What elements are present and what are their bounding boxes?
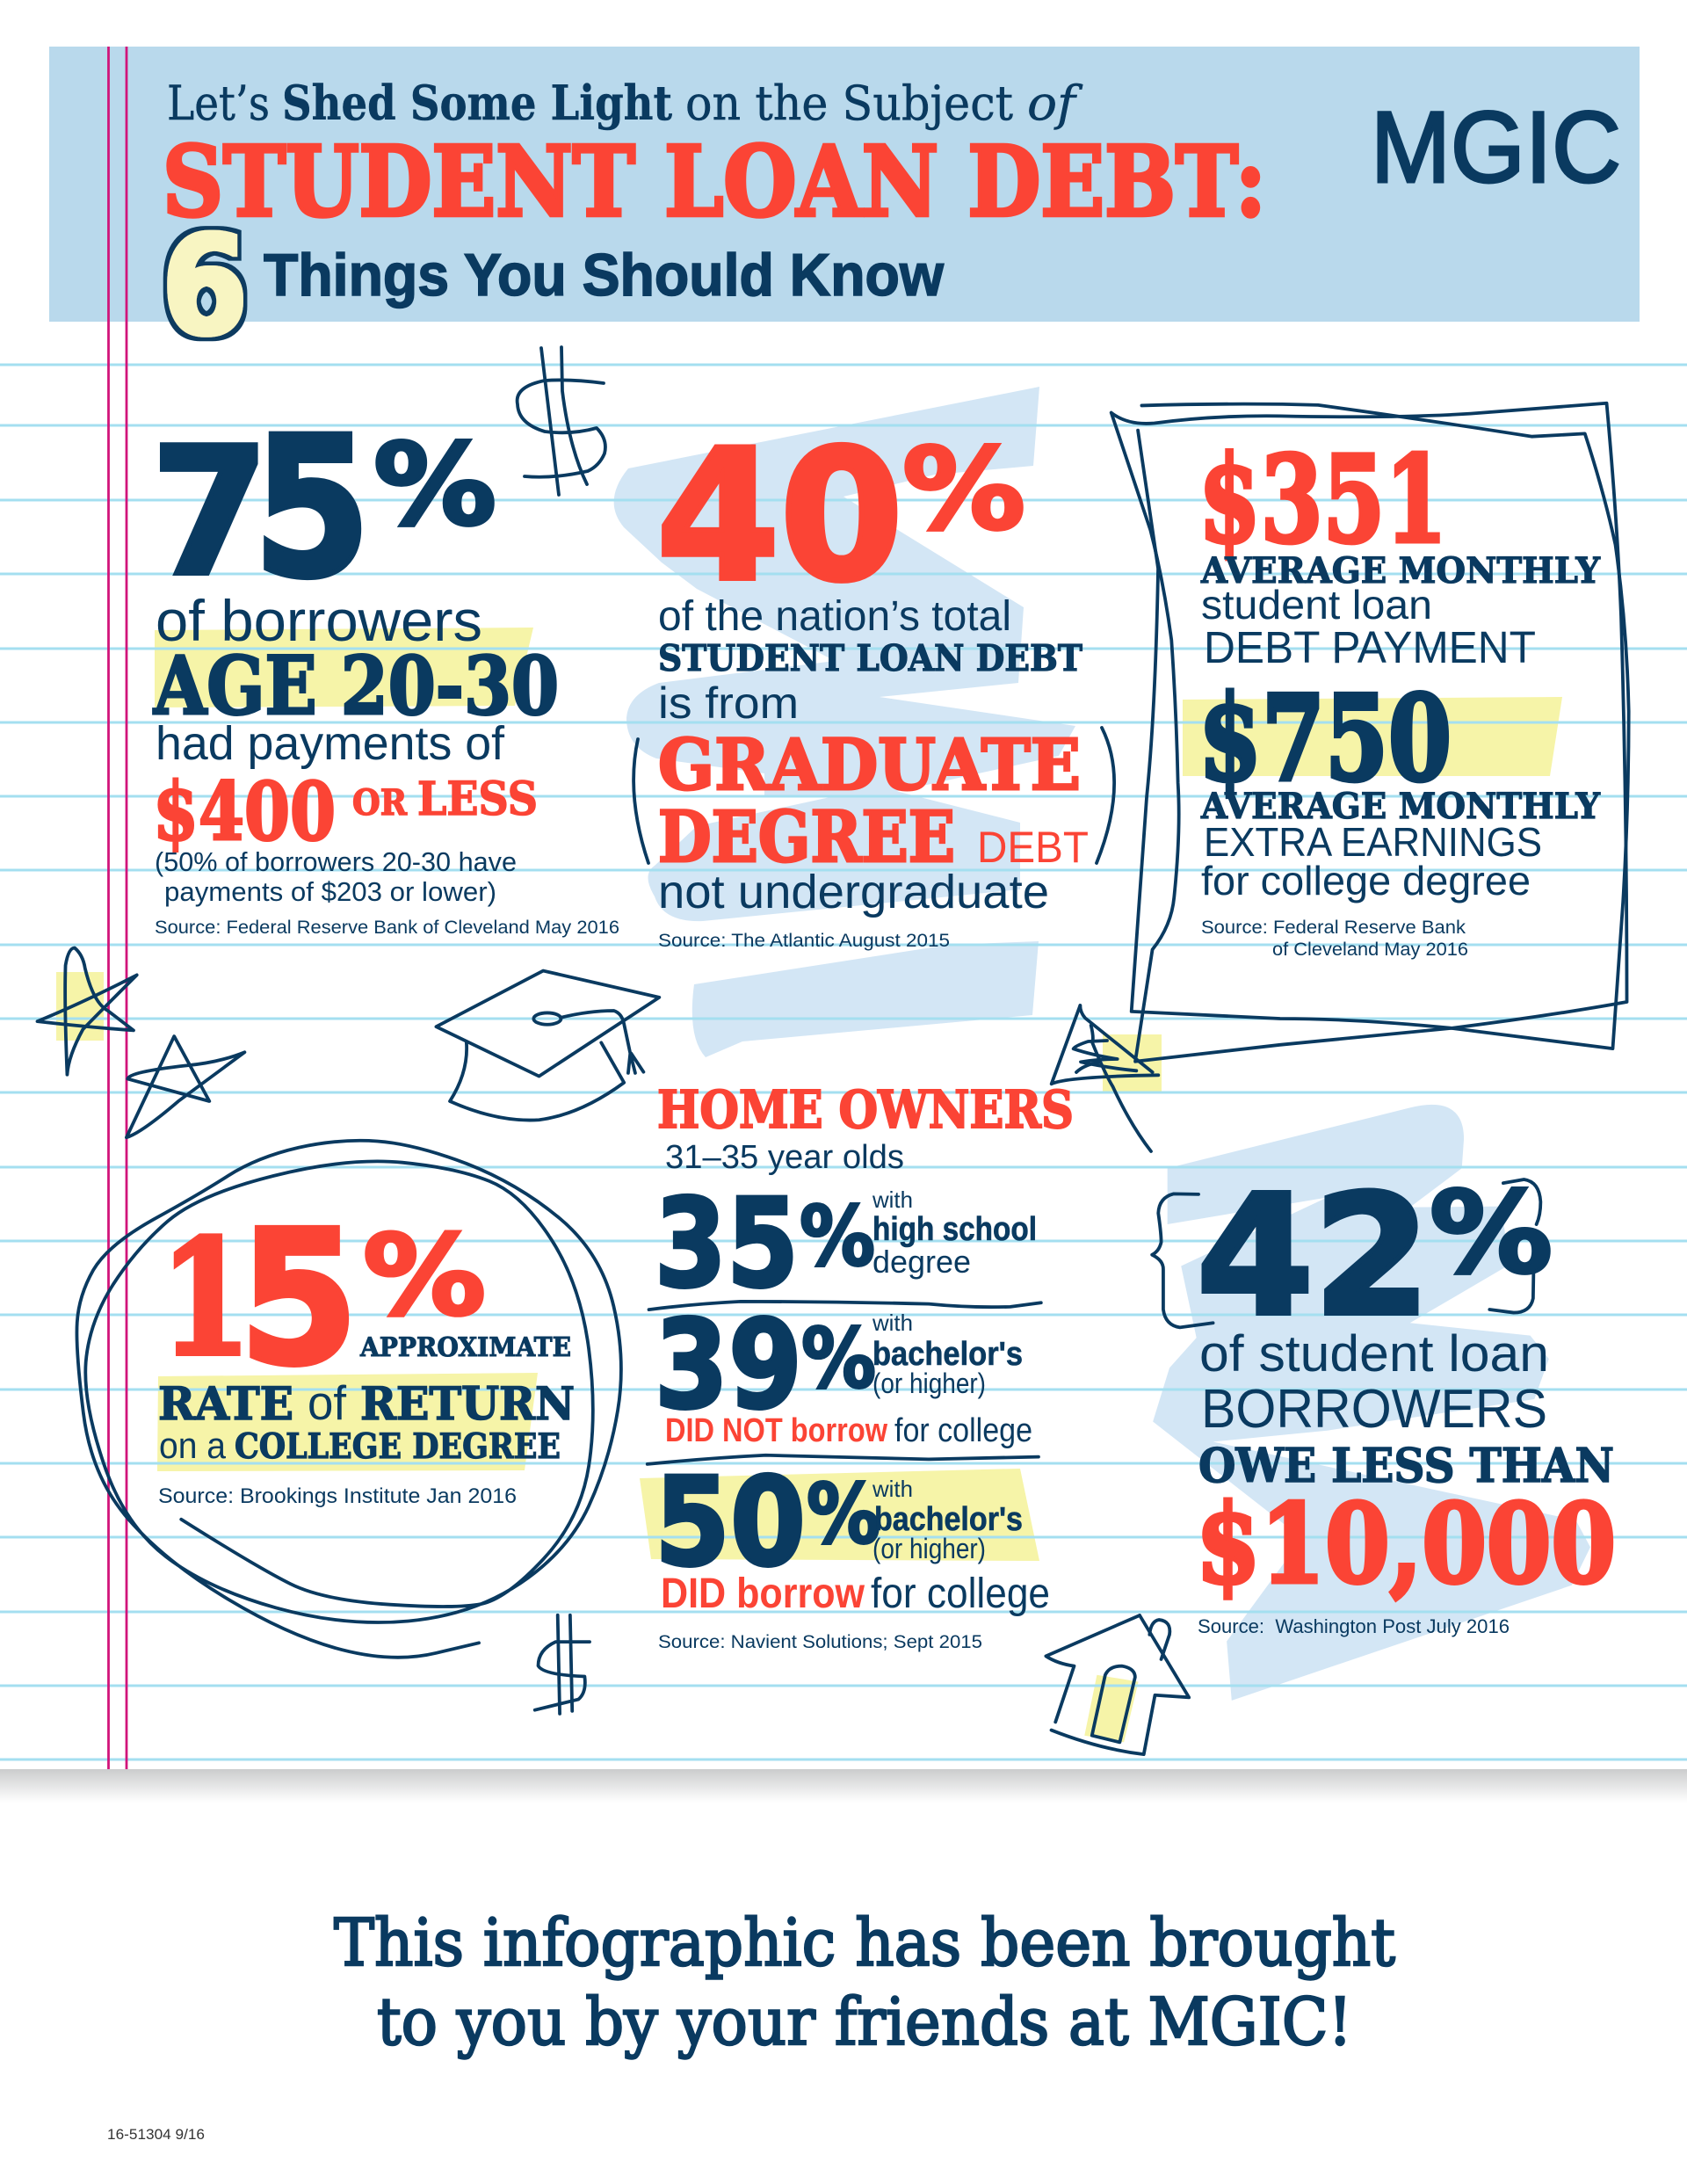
panel: 75 percent <box>151 395 619 938</box>
$750: $750 <box>1198 669 1452 808</box>
curly braces <box>1152 1179 1540 1327</box>
approximate: APPROXIMATE <box>359 1332 571 1363</box>
header banner background <box>49 47 1640 322</box>
percent sign: % <box>363 1211 486 1340</box>
subtitle line: on the Subject <box>685 76 1013 131</box>
did borrow: for college <box>871 1571 1050 1617</box>
row: 35 percent: with <box>872 1186 913 1213</box>
row: 50 percent <box>655 1451 1023 1593</box>
subheading: 31–35 year olds <box>665 1139 904 1176</box>
did not borrow: for college <box>894 1412 1032 1449</box>
row: 50 percent: (or higher) <box>872 1533 986 1564</box>
15 number <box>160 1191 358 1406</box>
$351: $351 <box>1198 430 1447 570</box>
big numeral 6: 6 <box>162 207 248 366</box>
note: (50% of borrowers 20-30 have <box>155 846 517 877</box>
40 number: 40 <box>656 412 903 621</box>
of borrowers: of borrowers <box>156 588 482 653</box>
panel: 15 percent rate of return <box>76 1141 621 1658</box>
source <box>1201 918 1468 960</box>
row: 39 percent: % <box>801 1311 876 1407</box>
or less: OR <box>352 782 408 824</box>
yellow highlights <box>56 628 1562 1742</box>
rate of return <box>158 1375 575 1431</box>
row: 50 percent: 50 <box>655 1451 806 1593</box>
row: 39 percent: 39 <box>655 1294 802 1436</box>
subtitle line <box>167 75 1082 131</box>
parentheses <box>634 728 1114 863</box>
percent sign: % <box>373 420 496 551</box>
notebook margin lines <box>109 47 127 1769</box>
source: Source: Federal Reserve Bank <box>1201 918 1466 938</box>
not undergraduate: not undergraduate <box>658 866 1049 918</box>
source: Source: Brookings Institute Jan 2016 <box>158 1484 517 1508</box>
sketched circle <box>76 1141 621 1658</box>
15 number: 5 <box>239 1191 358 1406</box>
borrowers: BORROWERS <box>1201 1379 1547 1440</box>
is from: is from <box>658 678 799 728</box>
closing message <box>334 1905 1395 2060</box>
row: 35 percent: 35 <box>655 1172 799 1315</box>
row: 39 percent: (or higher) <box>872 1368 986 1399</box>
things you should know: Things You Should Know <box>264 242 945 308</box>
main title: STUDENT LOAN DEBT: <box>163 125 1266 238</box>
source: Source: Washington Post July 2016 <box>1198 1615 1510 1637</box>
subtitle line: Let’s <box>167 76 270 131</box>
row: 50 percent: % <box>807 1467 880 1563</box>
row: 39 percent: bachelor's <box>872 1336 1023 1373</box>
row: 35 percent <box>655 1172 1037 1315</box>
panel: 40 percent <box>634 412 1114 951</box>
doodle: scribbled star by frame <box>1052 1005 1158 1151</box>
75 number: 7 <box>151 410 269 615</box>
$10,000: $10,000 <box>1196 1481 1616 1608</box>
paper bottom shadow <box>0 1769 1687 1803</box>
doodle: graduation cap <box>436 971 659 1121</box>
did borrow: DID borrow <box>661 1571 865 1617</box>
for college degree: for college degree <box>1201 858 1531 903</box>
row: 35 percent: % <box>800 1189 875 1285</box>
row: 50 percent: with <box>872 1476 913 1502</box>
on a college degree: COLLEGE DEGREE <box>235 1426 561 1467</box>
average monthly: AVERAGE MONTHLY <box>1200 550 1600 591</box>
extra earnings: EXTRA EARNINGS <box>1204 819 1542 865</box>
hand drawn dividers <box>648 1302 1041 1464</box>
row: 50 percent: bachelor's <box>874 1501 1023 1538</box>
row: 35 percent: high school <box>872 1211 1037 1248</box>
doodle: dollar sign top <box>518 347 605 495</box>
student loan: student loan <box>1201 582 1432 628</box>
closing message: to you by your friends at MGIC! <box>377 1984 1352 2060</box>
rate of return: RETURN <box>360 1378 575 1431</box>
debt: DEBT <box>977 823 1089 872</box>
or less: LESS <box>417 773 538 826</box>
on a college degree: on a <box>159 1425 227 1466</box>
MGIC logo: MGIC <box>1371 91 1621 204</box>
graduate degree <box>658 723 1081 878</box>
graduate degree: GRADUATE <box>658 723 1081 806</box>
row: 39 percent <box>655 1294 1023 1436</box>
panel: monthly payment and earnings <box>1111 403 1629 1062</box>
age 20-30: AGE 20-30 <box>153 640 559 733</box>
doodle: star with highlight <box>37 947 137 1075</box>
doodle: outline star <box>127 1036 244 1137</box>
student loan debt: STUDENT LOAN DEBT <box>658 637 1082 679</box>
note <box>155 846 517 907</box>
note: payments of $203 or lower) <box>164 876 496 907</box>
average monthly: AVERAGE MONTHLY <box>1200 786 1600 827</box>
owe less than: OWE LESS THAN <box>1198 1439 1614 1493</box>
source: Source: The Atlantic August 2015 <box>658 931 950 951</box>
75 number <box>151 395 371 620</box>
source: Source: Navient Solutions; Sept 2015 <box>658 1632 982 1652</box>
source: of Cleveland May 2016 <box>1272 940 1468 960</box>
rate of return: RATE <box>158 1378 293 1431</box>
75 number: 5 <box>253 395 371 620</box>
blue scribble behind 40% panel <box>614 387 1075 1057</box>
$400: $400 <box>153 765 336 859</box>
document code: 16-51304 9/16 <box>107 2126 205 2143</box>
header title block <box>162 75 1266 366</box>
subtitle line: Shed Some Light <box>282 75 672 131</box>
closing message: This infographic has been brought <box>334 1905 1395 1981</box>
42 number: 42 <box>1197 1160 1430 1353</box>
row: 39 percent: with <box>872 1310 913 1336</box>
notebook ruled lines <box>0 365 1687 1760</box>
debt payment: DEBT PAYMENT <box>1204 622 1536 672</box>
source: Source: Federal Reserve Bank of Cleveland May 2016 <box>155 918 619 938</box>
panel: home owners <box>655 1079 1074 1652</box>
doodle: dollar sign bottom <box>535 1615 590 1714</box>
percent sign: % <box>902 424 1025 555</box>
percent sign: % <box>1430 1168 1553 1299</box>
15 number: 1 <box>160 1206 251 1391</box>
heading: HOME OWNERS <box>657 1079 1074 1140</box>
of the nations total: of the nation’s total <box>658 593 1011 640</box>
row: 35 percent: degree <box>872 1244 971 1280</box>
rate of return: of <box>308 1375 347 1430</box>
or less <box>352 773 538 826</box>
graduate degree: DEGREE <box>658 795 955 878</box>
subtitle line: of <box>1027 76 1082 131</box>
did borrow <box>661 1571 1050 1617</box>
sketched frame <box>1111 403 1629 1062</box>
of student loan: of student loan <box>1199 1325 1549 1382</box>
doodle: house <box>1046 1615 1189 1754</box>
did not borrow: DID NOT borrow <box>665 1412 887 1449</box>
blue scribble behind 42% panel <box>1153 1105 1590 1701</box>
had payments of: had payments of <box>156 717 505 770</box>
panel: 42 percent <box>1152 1160 1616 1637</box>
